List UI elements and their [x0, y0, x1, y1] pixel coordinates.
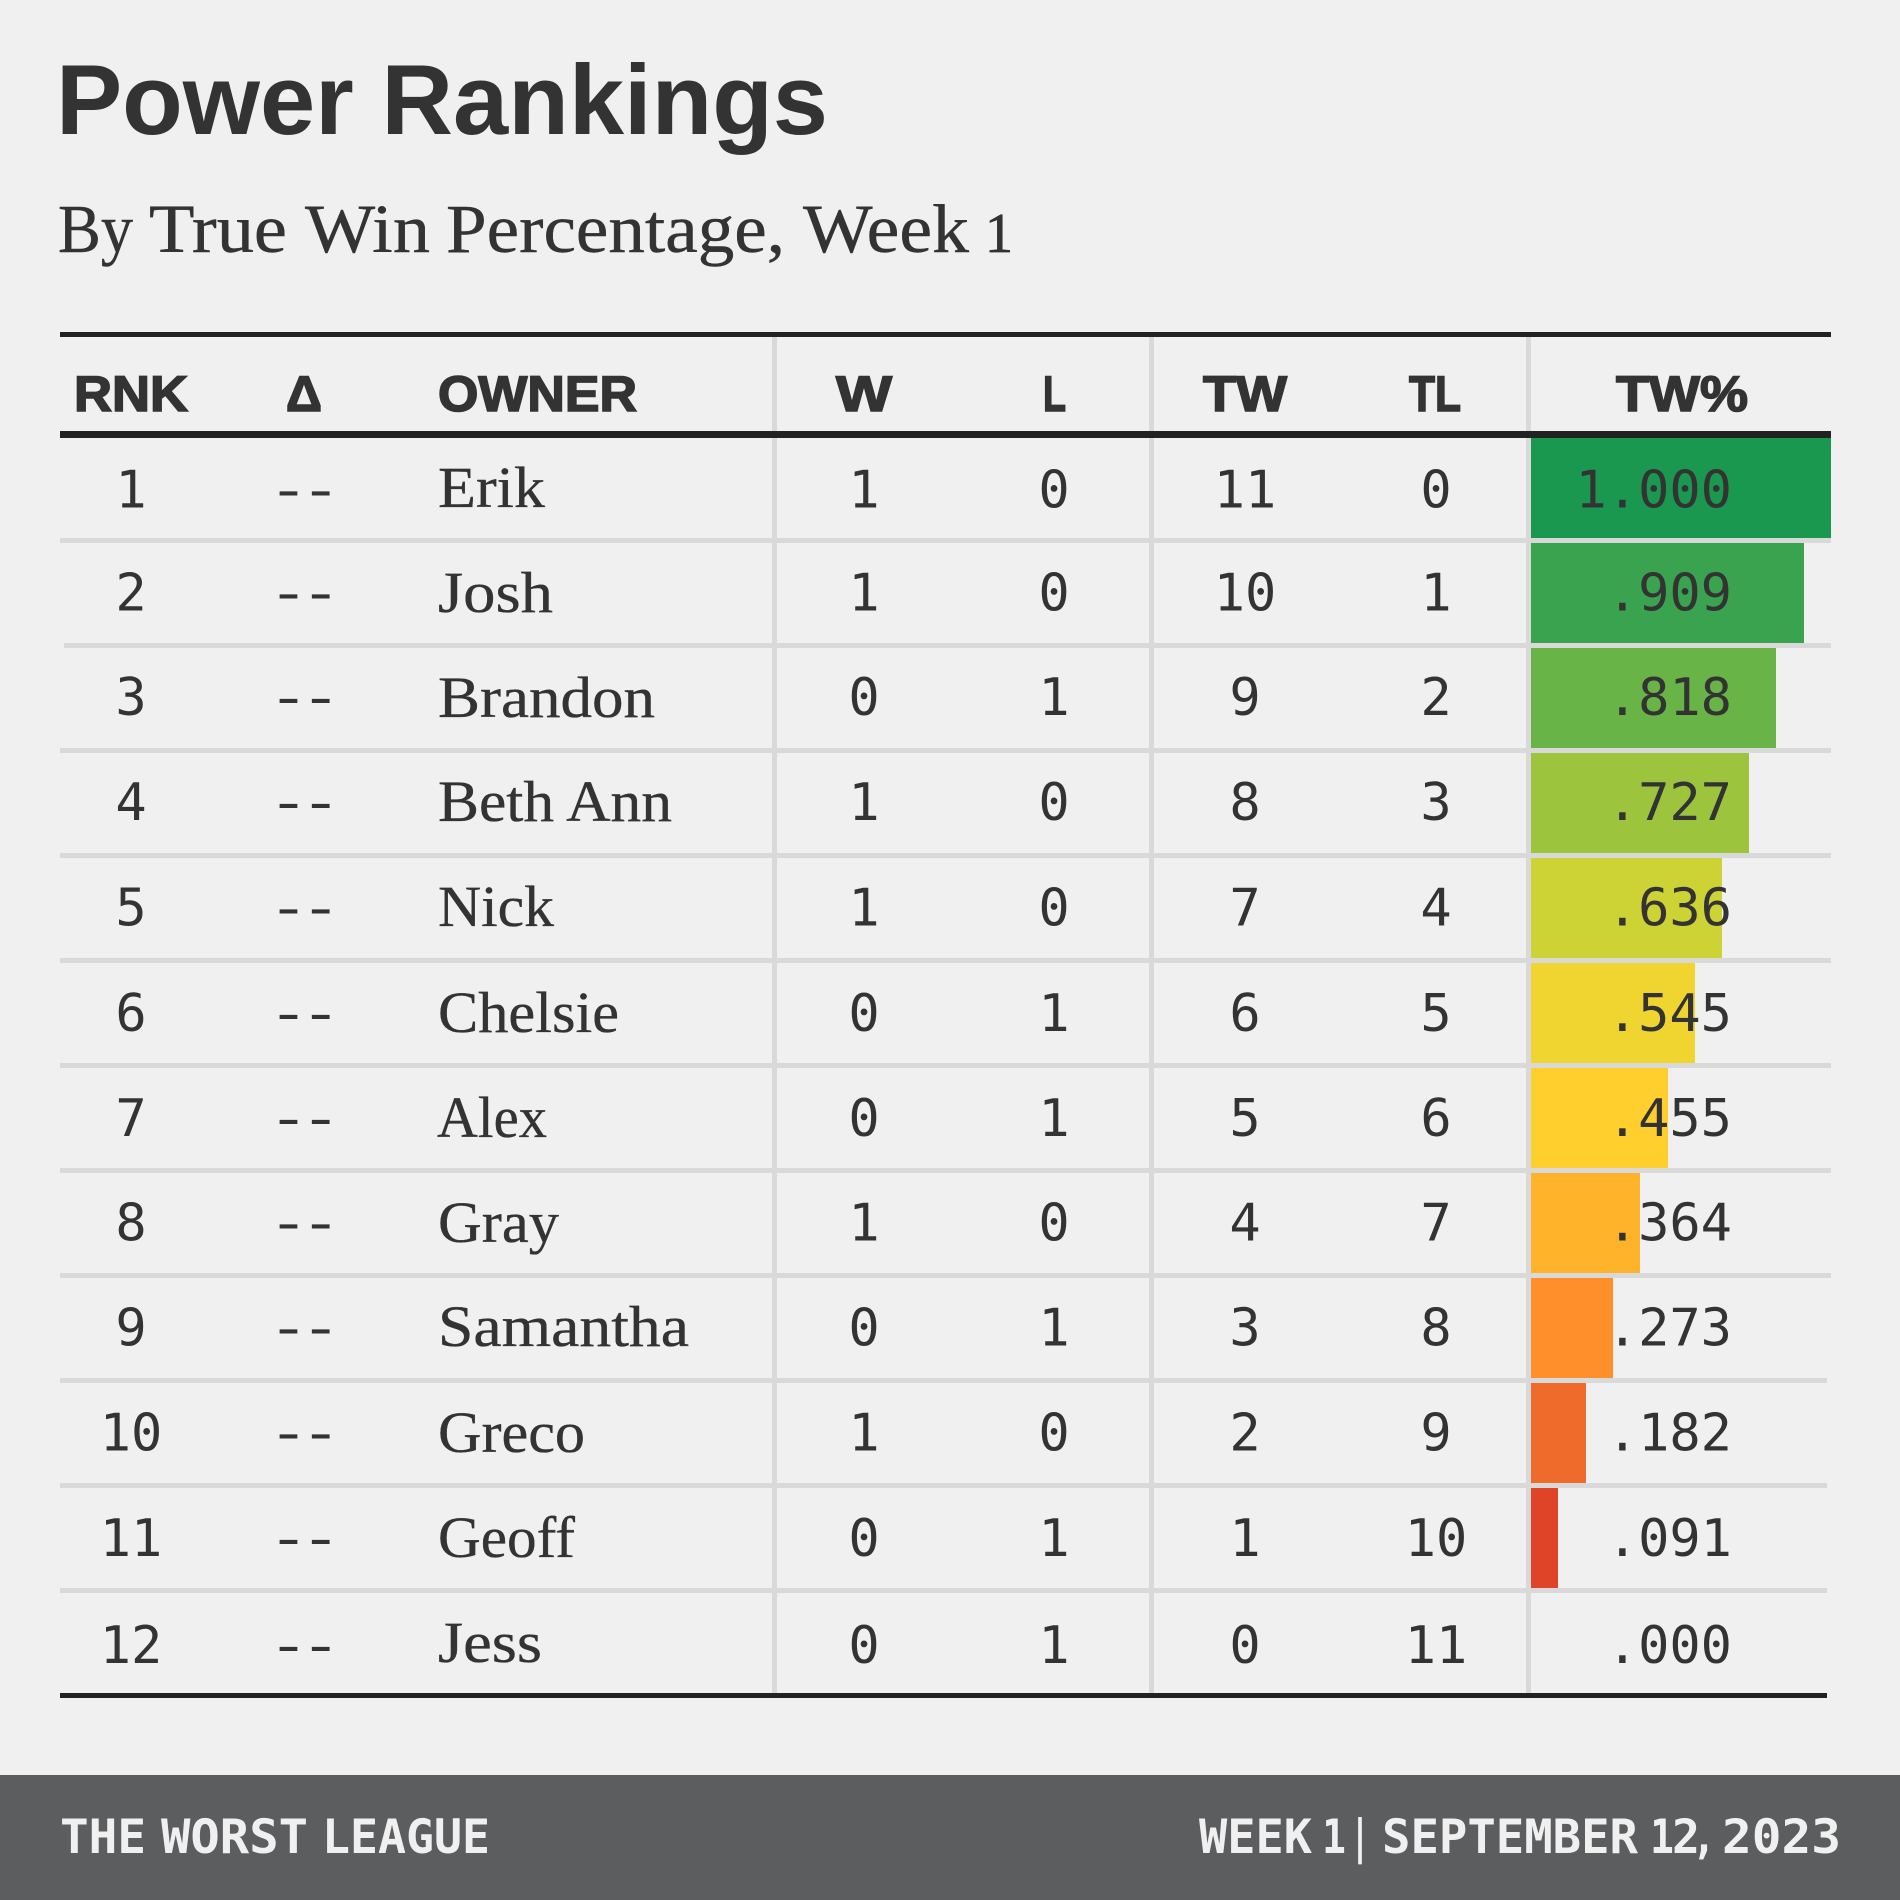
row 10: Greco: 10: [100, 1404, 162, 1464]
row 11: Geoff: 1: [1229, 1509, 1261, 1569]
row 12: Jess: 0: [1229, 1616, 1261, 1676]
row 1: Erik: 0: [1420, 460, 1452, 520]
footer: league name: THE: [60, 1810, 146, 1865]
row 2: Josh: 1: [1420, 564, 1452, 624]
subtitle: Week: [803, 191, 970, 267]
row 6: Chelsie: 6: [1229, 984, 1261, 1044]
row 12: Jess: 1: [1038, 1616, 1070, 1676]
row 2: Josh: .909: [1607, 564, 1732, 624]
row 10: Greco: Greco: [438, 1400, 585, 1465]
row 3: Brandon: .818: [1607, 668, 1732, 728]
row 4: Beth Ann: Beth Ann: [438, 769, 672, 834]
row 1: Erik: [115, 455, 1732, 520]
row 11: Geoff: 0: [848, 1509, 880, 1569]
row 6: Chelsie: 5: [1420, 984, 1452, 1044]
row 8: Gray: 4: [1229, 1194, 1261, 1254]
row 6: Chelsie: 6: [115, 984, 147, 1044]
footer: league name: [60, 1810, 490, 1865]
table header row: W: [836, 366, 893, 422]
row 11: Geoff: [100, 1505, 1732, 1570]
row 10: Greco: 9: [1420, 1404, 1452, 1464]
row 10: Greco: --: [268, 1403, 332, 1463]
row 3: Brandon: 3: [115, 668, 147, 728]
footer band: [0, 1775, 1900, 1900]
row 1: Erik: --: [268, 460, 332, 520]
row 7: Alex: .455: [1607, 1089, 1732, 1149]
row 12: Jess: Jess: [438, 1610, 542, 1675]
row 1: Erik: Erik: [438, 455, 545, 520]
row 3: Brandon: Brandon: [438, 665, 655, 730]
row 7: Alex: 0: [848, 1089, 880, 1149]
table header row: Δ: [286, 366, 322, 422]
table header row: [74, 366, 1748, 422]
row 11: Geoff: 11: [100, 1509, 162, 1569]
row 1: Erik: 1.000: [1575, 460, 1732, 520]
row 12: Jess: 0: [848, 1616, 880, 1676]
table header row: L: [1043, 366, 1066, 422]
row 2: Josh: Josh: [438, 560, 553, 625]
row 11: Geoff: Geoff: [438, 1505, 576, 1570]
subtitle: Win: [305, 191, 430, 267]
row 3: Brandon: --: [268, 668, 332, 728]
footer: week and date: 1: [1322, 1810, 1346, 1865]
row 1: Erik: 1: [848, 460, 880, 520]
row 5: Nick: [115, 874, 1732, 939]
row 9: Samantha: .273: [1607, 1298, 1732, 1358]
row 9: Samantha: 8: [1420, 1298, 1452, 1358]
row 9: Samantha: --: [268, 1298, 332, 1358]
row 8: Gray: 1: [848, 1194, 880, 1254]
row 1: Erik: 1: [115, 460, 147, 520]
row 8: Gray: .364: [1607, 1194, 1732, 1254]
subtitle: Percentage,: [446, 191, 785, 267]
row 12: Jess: 11: [1405, 1616, 1467, 1676]
row 9: Samantha: 3: [1229, 1298, 1261, 1358]
row 4: Beth Ann: 1: [848, 773, 880, 833]
row 7: Alex: Alex: [437, 1085, 547, 1150]
row 2: Josh: 2: [115, 564, 147, 624]
footer: week and date: WEEK: [1199, 1810, 1313, 1865]
row 4: Beth Ann: 4: [115, 773, 147, 833]
table header row: TL: [1409, 366, 1461, 422]
row 5: Nick: 5: [115, 878, 147, 938]
row 4: Beth Ann: [115, 769, 1732, 834]
row 8: Gray: --: [268, 1193, 332, 1253]
row 1: Erik: 0: [1038, 460, 1070, 520]
row 5: Nick: .636: [1607, 878, 1732, 938]
row 4: Beth Ann: .727: [1607, 773, 1732, 833]
row 9: Samantha: 9: [115, 1298, 147, 1358]
row 3: Brandon: 9: [1229, 668, 1261, 728]
row 7: Alex: 1: [1038, 1089, 1070, 1149]
row 4: Beth Ann: --: [268, 773, 332, 833]
subtitle: True: [149, 191, 287, 267]
row 5: Nick: 0: [1038, 878, 1070, 938]
row 6: Chelsie: 1: [1038, 984, 1070, 1044]
row 6: Chelsie: Chelsie: [438, 980, 619, 1045]
row 8: Gray: 8: [115, 1194, 147, 1254]
footer: league name: LEAGUE: [322, 1810, 490, 1865]
row 6: Chelsie: --: [268, 984, 332, 1044]
row 4: Beth Ann: 3: [1420, 773, 1452, 833]
row 9: Samantha: 1: [1038, 1298, 1070, 1358]
footer: week and date: [1199, 1810, 1841, 1865]
bars: true win percentage: [1531, 438, 1831, 1588]
title: Power Rankings: [56, 44, 828, 155]
subtitle: [58, 191, 1013, 267]
subtitle: 1: [985, 203, 1013, 265]
row 10: Greco: .182: [1607, 1404, 1732, 1464]
row 4: Beth Ann: 0: [1038, 773, 1070, 833]
row 2: Josh: [115, 560, 1732, 625]
row 5: Nick: 4: [1420, 878, 1452, 938]
row 10: Greco: 0: [1038, 1404, 1070, 1464]
row 11: Geoff: 10: [1405, 1509, 1467, 1569]
row 8: Gray: [115, 1190, 1732, 1255]
row 1: Erik: 11: [1214, 460, 1276, 520]
row 5: Nick: Nick: [438, 874, 554, 939]
row 11: Geoff: 1: [1038, 1509, 1070, 1569]
row 9: Samantha: Samantha: [438, 1294, 689, 1359]
row 8: Gray: 0: [1038, 1194, 1070, 1254]
row 3: Brandon: 0: [848, 668, 880, 728]
row 2: Josh: --: [268, 563, 332, 623]
row 2: Josh: 10: [1214, 564, 1276, 624]
table header row: TW%: [1616, 366, 1748, 422]
row 3: Brandon: 1: [1038, 668, 1070, 728]
footer: week and date: SEPTEMBER: [1382, 1810, 1639, 1865]
table header row: RNK: [74, 366, 188, 422]
row 11: Geoff: .091: [1607, 1509, 1732, 1569]
footer: week and date: ,: [1692, 1810, 1716, 1865]
subtitle: By: [58, 191, 133, 267]
row 4: Beth Ann: 8: [1229, 773, 1261, 833]
row 7: Alex: --: [268, 1089, 332, 1149]
footer: week and date: |: [1350, 1810, 1370, 1865]
row 5: Nick: 1: [848, 878, 880, 938]
row 7: Alex: 6: [1420, 1089, 1452, 1149]
row 5: Nick: --: [268, 878, 332, 938]
row 5: Nick: 7: [1229, 878, 1261, 938]
row 10: Greco: 1: [848, 1404, 880, 1464]
row 6: Chelsie: .545: [1607, 984, 1732, 1044]
table header row: OWNER: [438, 366, 637, 422]
table header row: TW: [1203, 366, 1288, 422]
row 12: Jess: .000: [1607, 1616, 1732, 1676]
row 7: Alex: 7: [115, 1089, 147, 1149]
row 12: Jess: 12: [100, 1616, 162, 1676]
footer: week and date: 2023: [1722, 1810, 1841, 1865]
footer: week and date: 2: [1672, 1810, 1700, 1865]
row 7: Alex: [115, 1085, 1732, 1150]
row 3: Brandon: [115, 665, 1732, 730]
row 6: Chelsie: [115, 980, 1732, 1045]
row 2: Josh: 0: [1038, 564, 1070, 624]
row 7: Alex: 5: [1229, 1089, 1261, 1149]
row 9: Samantha: [115, 1294, 1732, 1359]
row 12: Jess: [100, 1610, 1732, 1676]
row 12: Jess: --: [268, 1616, 332, 1676]
row 10: Greco: [100, 1400, 1732, 1465]
row 2: Josh: 1: [848, 564, 880, 624]
row 3: Brandon: 2: [1420, 668, 1452, 728]
row 6: Chelsie: 0: [848, 984, 880, 1044]
row 10: Greco: 2: [1229, 1404, 1261, 1464]
row 9: Samantha: 0: [848, 1298, 880, 1358]
footer: week and date: 1: [1650, 1810, 1674, 1865]
row 11: Geoff: --: [268, 1509, 332, 1569]
row 8: Gray: Gray: [438, 1190, 559, 1255]
footer: league name: WORST: [161, 1810, 308, 1865]
row 8: Gray: 7: [1420, 1194, 1452, 1254]
